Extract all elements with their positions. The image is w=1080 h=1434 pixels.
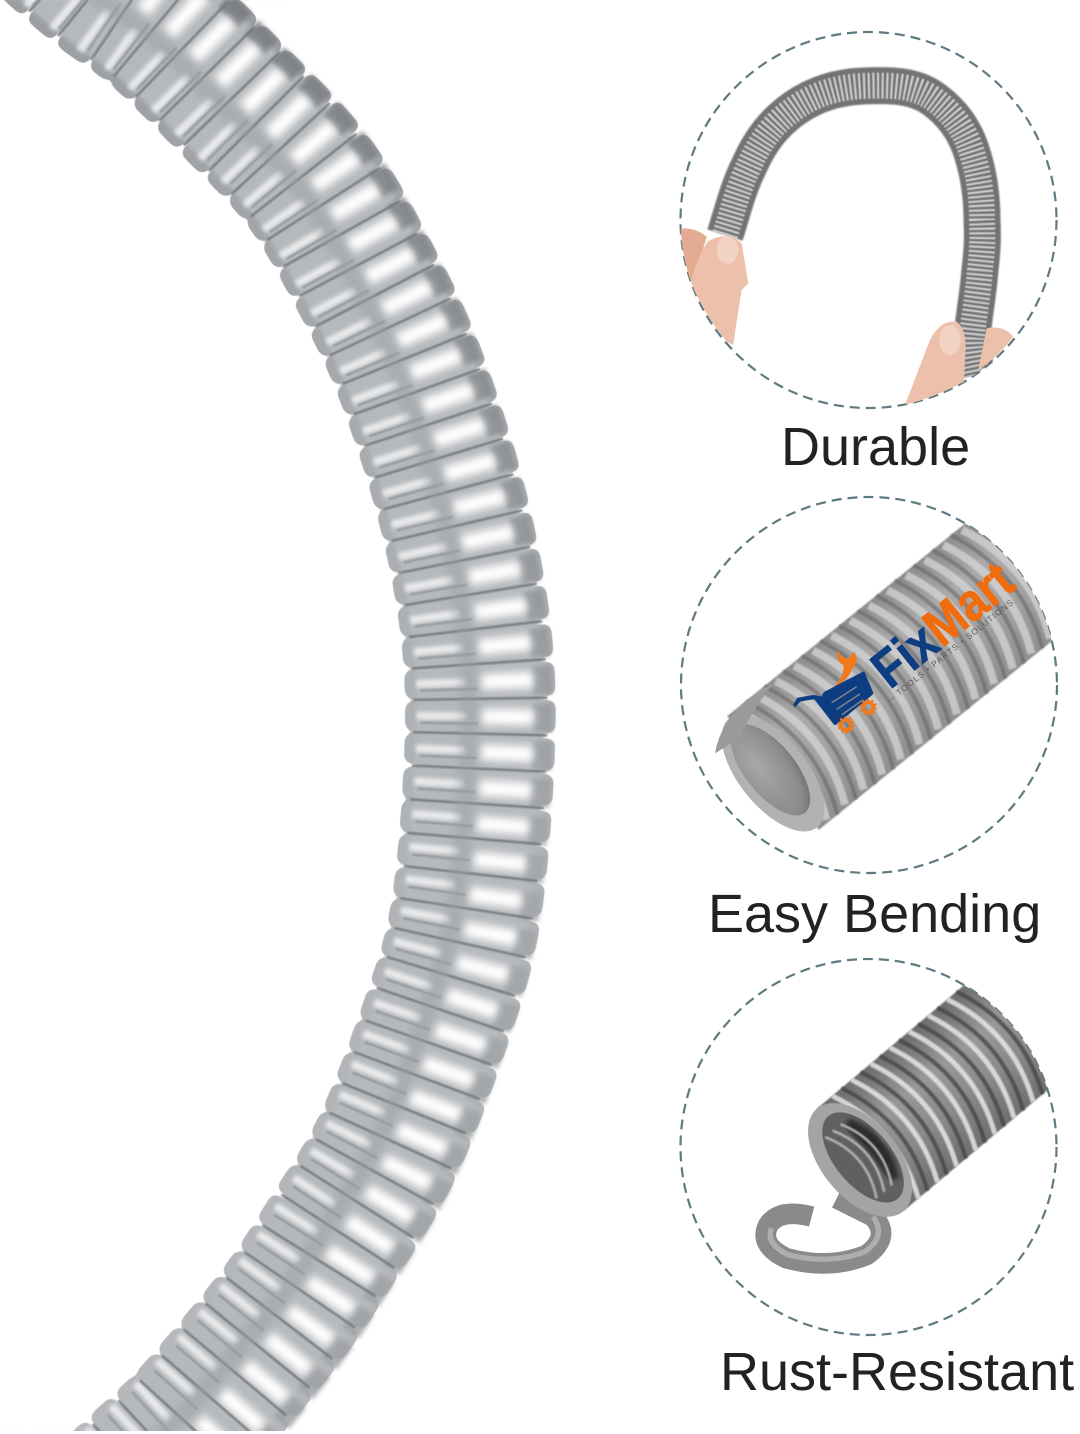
hook bbox=[766, 1198, 881, 1263]
coil highlights bbox=[751, 526, 1051, 822]
icon: right fingernail bbox=[939, 325, 961, 355]
icon: left fingernail bbox=[717, 236, 738, 264]
spring body bbox=[726, 524, 1052, 830]
spring end close-up bbox=[715, 524, 1052, 832]
logo wordmark: FixMart bbox=[861, 551, 1025, 699]
open end rim bbox=[722, 716, 824, 832]
logo: FixMart bbox=[795, 551, 1025, 732]
logo tagline: — TOOLS • PARTS • SOLUTIONS bbox=[884, 597, 1015, 706]
panel: rust-resistant bbox=[679, 958, 1074, 1390]
dashed circle: rust-resistant bbox=[680, 959, 1056, 1335]
panel: durable bbox=[678, 32, 1056, 477]
icon: cart with wrench and gears bbox=[795, 651, 876, 732]
coil highlights bbox=[830, 986, 1036, 1200]
icon: right fingers bbox=[905, 322, 1013, 405]
cut wire lip bbox=[715, 680, 777, 753]
panel: easy bending bbox=[681, 490, 1080, 944]
label: Easy Bending: Easy Bending bbox=[708, 884, 1041, 944]
interior coil glints bbox=[824, 1122, 894, 1200]
icon: left fingers bbox=[678, 229, 748, 345]
open end interior bbox=[822, 1112, 904, 1202]
main coiled spring bbox=[0, 0, 560, 1431]
spring body bbox=[816, 985, 1048, 1212]
open end rim bbox=[808, 1103, 912, 1217]
open end interior bbox=[731, 724, 810, 816]
dashed circle: durable bbox=[680, 32, 1056, 408]
coil seams bbox=[840, 989, 1046, 1192]
dashed circle: easy bending bbox=[681, 497, 1057, 873]
label: Rust-Resistant: Rust-Resistant bbox=[720, 1342, 1074, 1402]
bent spring held in fingers bbox=[678, 86, 1013, 405]
spring with hook end bbox=[755, 985, 1048, 1274]
interior dark crescent bbox=[848, 1117, 902, 1179]
coil seams bbox=[744, 532, 1046, 816]
label: Durable: Durable bbox=[781, 417, 970, 477]
